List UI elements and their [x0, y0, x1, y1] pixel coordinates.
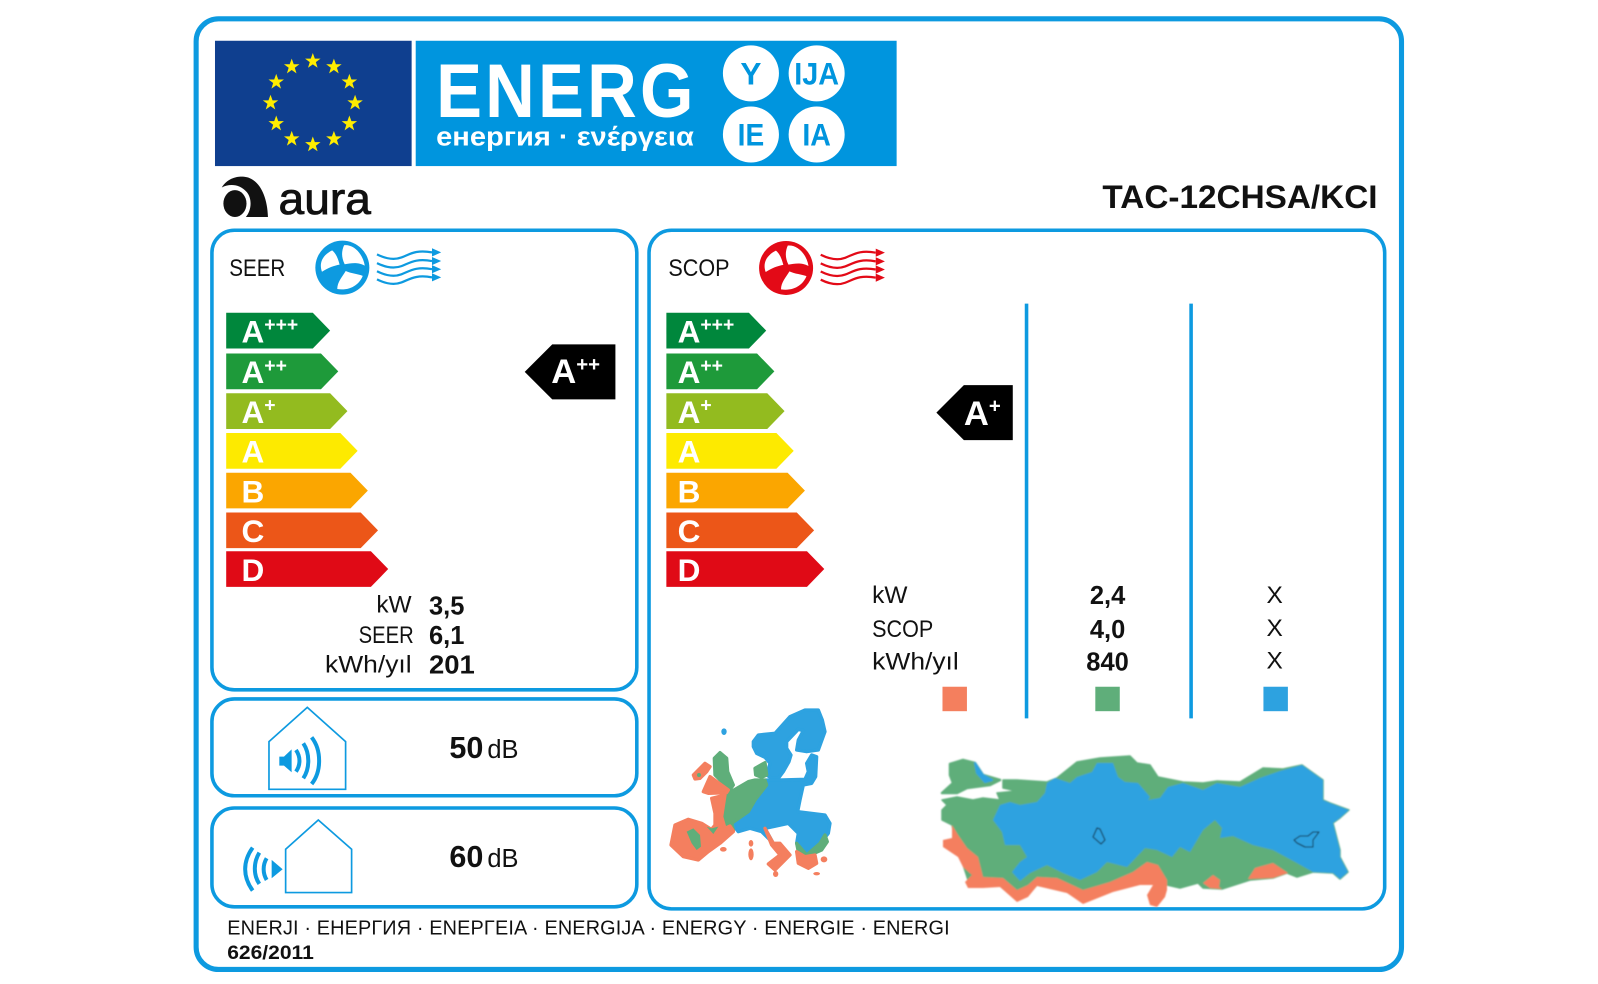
SCOP values table: X — [1266, 647, 1283, 674]
SCOP values table: X — [1266, 582, 1283, 609]
panel: SEER — [212, 230, 637, 690]
energy scale: SCOP: A — [678, 434, 700, 470]
energy banner: ENERG — [436, 49, 697, 134]
energy scale: SEER: A — [241, 354, 264, 390]
rating tag: A++: ++ — [576, 354, 600, 376]
energy banner: енергия · ενέργεια — [436, 122, 695, 152]
SEER values: SEER — [359, 622, 414, 649]
SEER heading: SEER — [229, 255, 285, 282]
energy scale: SCOP: B — [678, 473, 700, 509]
icon: house with speaker inside — [269, 707, 346, 789]
energy scale: SEER: D — [241, 552, 264, 588]
EU flag — [215, 41, 412, 166]
energy scale: SCOP: +++ — [700, 314, 734, 336]
SCOP values table: 840 — [1086, 648, 1129, 676]
SCOP heading: SCOP — [668, 255, 730, 282]
aura logo — [222, 173, 371, 224]
energy banner — [416, 41, 897, 166]
energy scale: SEER: +++ — [264, 314, 298, 336]
outer frame — [196, 19, 1401, 969]
energy scale: SEER: C — [241, 513, 264, 549]
rating tag: A++ — [525, 344, 615, 399]
indoor dB value: 50dB — [449, 731, 519, 765]
SCOP values table: 4,0 — [1090, 616, 1125, 644]
SEER values — [325, 591, 475, 679]
SCOP values table: kW — [872, 582, 907, 609]
energy scale: SCOP: ++ — [700, 355, 723, 377]
climate column dividers — [1027, 304, 1191, 718]
panel: outdoor noise — [212, 808, 637, 907]
energy scale: SEER — [226, 313, 388, 588]
energy scale: SCOP: A — [678, 394, 700, 430]
SCOP values table: 2,4 — [1090, 582, 1126, 610]
energy banner: IA — [802, 117, 831, 153]
SCOP values table: SCOP — [872, 616, 933, 643]
energy scale: SCOP: A — [678, 313, 700, 349]
energy scale: SCOP — [666, 313, 824, 588]
energy scale: SCOP: D — [678, 552, 700, 588]
climate legend swatches — [942, 687, 1288, 711]
energy scale: SEER: A — [241, 313, 264, 349]
SEER values: 201 — [429, 651, 475, 679]
footer text: ENERJI · ЕНЕРГИЯ · ΕΝΕΡΓΕΙΑ · ENERGIJA · ENERGY · ENERGIE · ENERGI — [227, 917, 950, 939]
energy scale: SEER: B — [241, 473, 264, 509]
icon: house with speaker outside — [245, 820, 352, 893]
rating tag: A+ — [936, 385, 1013, 440]
SEER values: 6,1 — [429, 622, 464, 650]
SCOP values table: kWh/yıl — [872, 648, 959, 675]
energy scale: SEER: + — [264, 395, 276, 417]
footer text: 626/2011 — [227, 942, 314, 964]
map: Europe climate zones — [671, 710, 830, 877]
panel: indoor noise — [212, 699, 637, 796]
energy scale: SCOP: A — [678, 354, 700, 390]
energy scale: SEER: A — [241, 394, 264, 430]
energy scale: SEER: ++ — [264, 355, 287, 377]
rating tag: A+: A — [964, 395, 989, 433]
energy banner: Y — [740, 56, 761, 92]
rating tag: A+: + — [989, 396, 1001, 418]
rating tag: A++: A — [551, 353, 576, 391]
energy scale: SCOP: C — [678, 513, 700, 549]
map: Turkey climate zones — [942, 756, 1349, 907]
SCOP values table: X — [1266, 615, 1283, 642]
footer text — [227, 917, 950, 964]
energy banner: IJA — [794, 56, 839, 92]
icon: red fan with air waves — [759, 241, 885, 295]
SEER values: kWh/yıl — [325, 651, 412, 678]
energy scale: SCOP: + — [700, 395, 712, 417]
outdoor dB value: 60dB — [449, 840, 519, 874]
SEER values: 3,5 — [429, 592, 464, 620]
SCOP values table — [872, 582, 1283, 676]
icon: blue fan with air waves — [315, 241, 441, 295]
panel: SCOP — [649, 230, 1385, 909]
model name: TAC-12CHSA/KCI — [1102, 178, 1378, 215]
aura logo: aura — [279, 173, 371, 224]
energy banner: IE — [738, 117, 764, 153]
energy scale: SEER: A — [241, 434, 264, 470]
SEER values: kW — [376, 591, 412, 618]
